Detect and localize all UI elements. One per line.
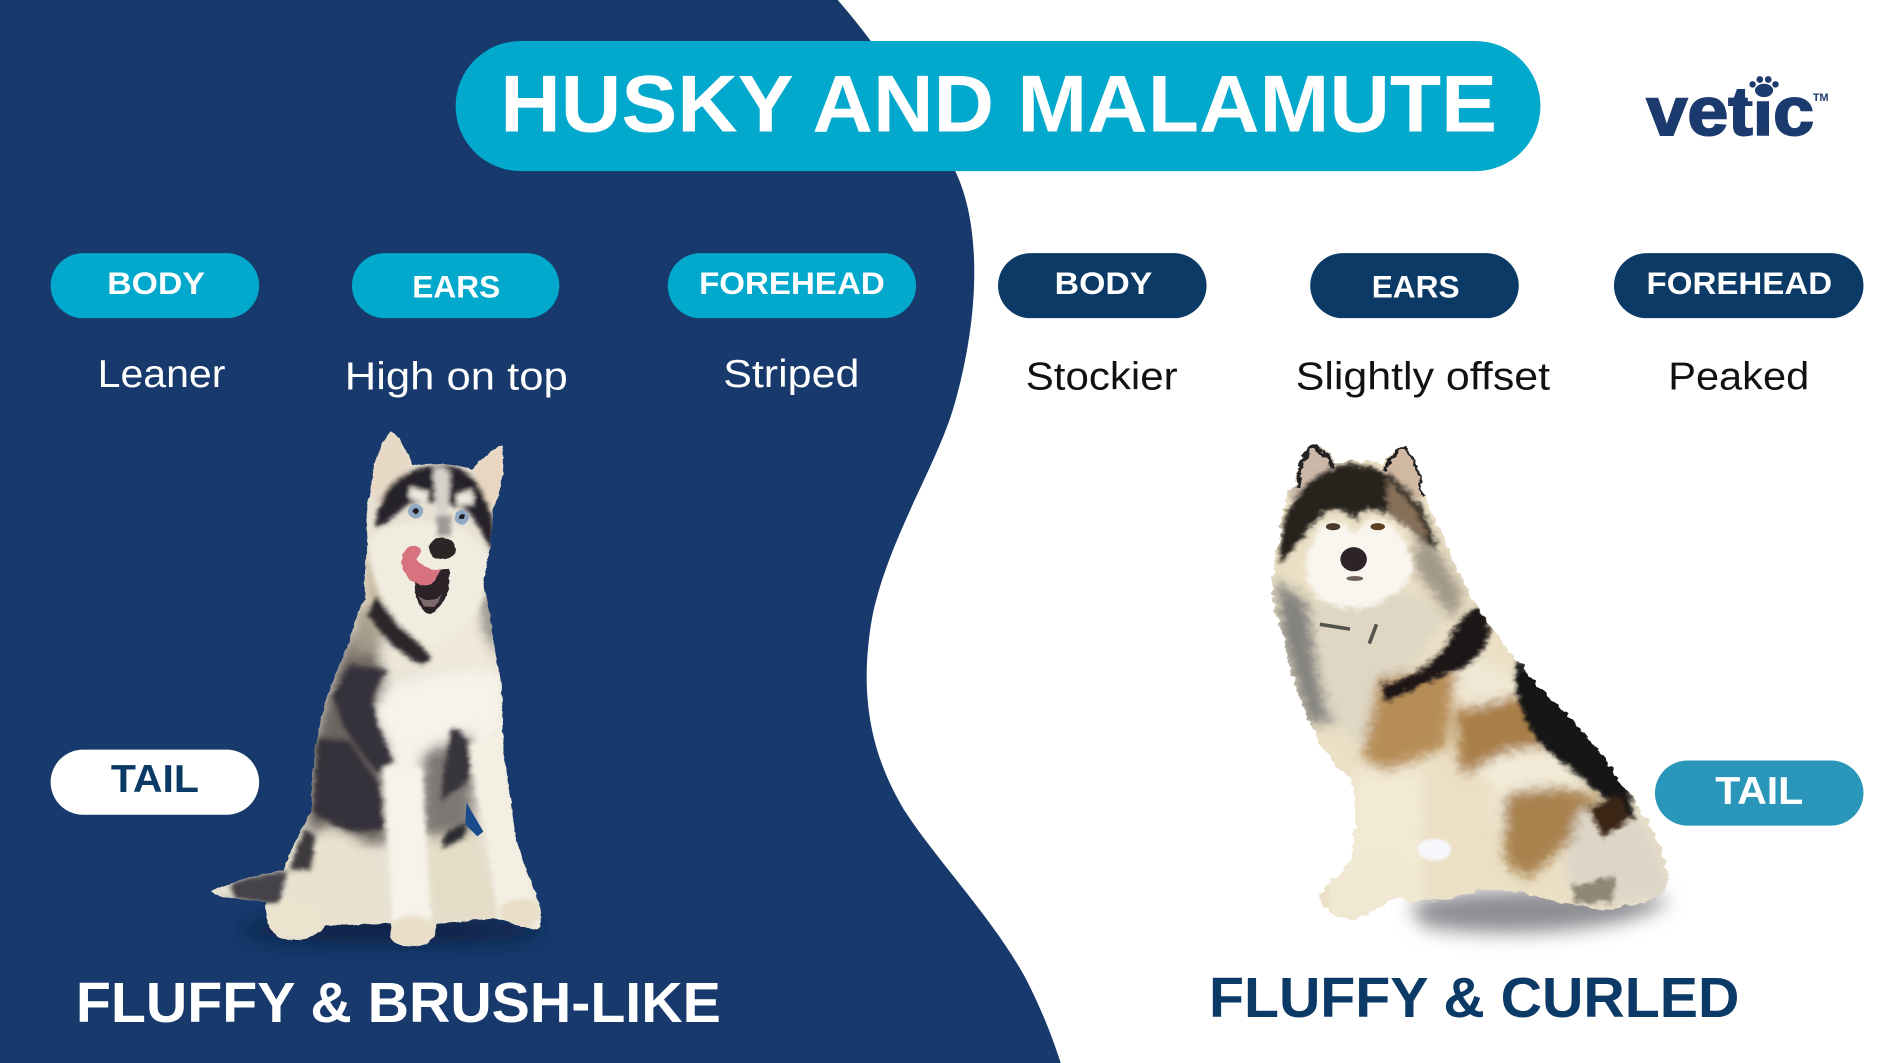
heading: malamute tail: FLUFFY & CURLED — [1209, 967, 1739, 1030]
pill: forehead (husky) — [668, 253, 916, 318]
pill: ears (husky): EARS — [412, 270, 500, 305]
icon: paw — [1749, 76, 1779, 97]
panel: husky traits — [51, 253, 916, 398]
pill: body (husky) — [51, 253, 259, 318]
pill: tail (husky): TAIL — [111, 758, 199, 801]
pill: forehead (husky): FOREHEAD — [699, 266, 885, 301]
leg gap — [465, 803, 483, 836]
illustration: husky — [205, 422, 554, 952]
heading: husky tail: FLUFFY & BRUSH-LIKE — [76, 972, 721, 1035]
title pill: HUSKY AND MALAMUTE — [500, 59, 1497, 149]
text: high on top: High on top — [345, 355, 568, 398]
text: slightly offset: Slightly offset — [1296, 355, 1550, 398]
pill: ears (malamute): EARS — [1372, 270, 1460, 305]
pill: body (malamute): BODY — [1055, 266, 1152, 301]
panel: malamute traits — [998, 253, 1863, 398]
title pill — [456, 41, 1540, 171]
pill: body (husky): BODY — [107, 266, 205, 301]
pill: tail (malamute): TAIL — [1715, 770, 1803, 813]
illustration: malamute — [1266, 434, 1675, 933]
snow between legs — [1418, 839, 1451, 861]
pill: ears (husky) — [352, 253, 559, 318]
nose — [1340, 547, 1367, 571]
logo: vetic: vetic — [1647, 73, 1814, 150]
logo: vetic: TM — [1813, 92, 1828, 104]
pill: tail (husky) — [51, 750, 259, 815]
panel: navy left wave background — [0, 0, 1061, 1063]
text: stockier: Stockier — [1026, 355, 1178, 398]
pill: forehead (malamute) — [1614, 253, 1863, 318]
pill: ears (malamute) — [1310, 253, 1519, 318]
collar — [1320, 624, 1377, 644]
pill: tail (malamute) — [1655, 760, 1863, 826]
pill: body (malamute) — [998, 253, 1207, 318]
pill: forehead (malamute): FOREHEAD — [1647, 266, 1832, 301]
text: striped: Striped — [723, 353, 859, 396]
text: leaner: Leaner — [98, 353, 226, 396]
text: peaked: Peaked — [1668, 355, 1809, 398]
eyes — [1326, 523, 1340, 530]
